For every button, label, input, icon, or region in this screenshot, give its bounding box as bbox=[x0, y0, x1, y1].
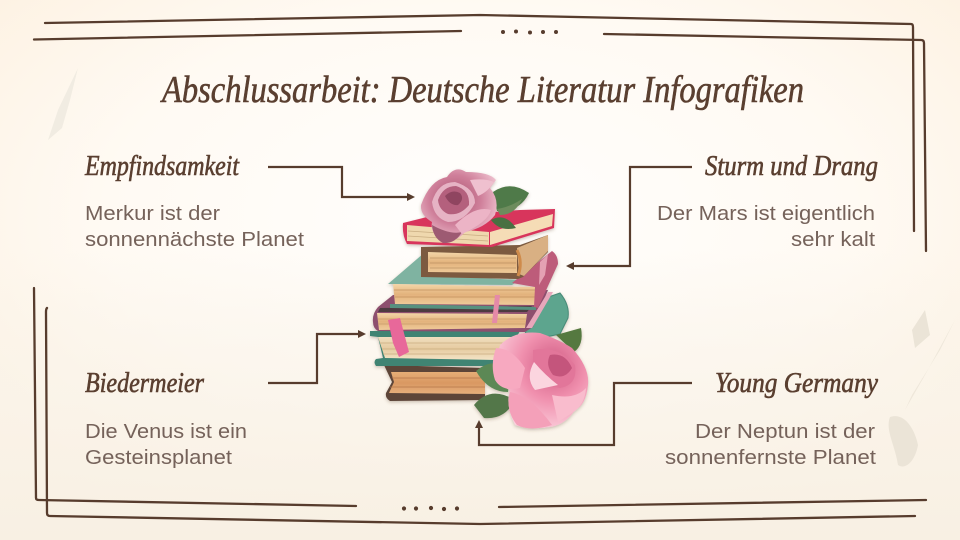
block: Sturm und Drang bbox=[657, 151, 878, 251]
book 6: bottom bbox=[384, 365, 485, 401]
book: green behind bbox=[522, 293, 568, 342]
leaves: bottom rose bbox=[474, 328, 582, 418]
book 3: green top, pink spine bbox=[388, 251, 558, 310]
block: Young Germany bbox=[665, 368, 879, 469]
illustration: book stack with roses bbox=[370, 169, 588, 428]
heading: Young Germany: Young Germany bbox=[715, 368, 879, 399]
bookmark: large bbox=[388, 318, 409, 357]
title: Abschlussarbeit: Deutsche Literatur Infografiken bbox=[159, 69, 804, 111]
text: Mars: sehr kalt bbox=[791, 229, 875, 251]
decorative frame: top right bbox=[34, 15, 926, 251]
text: Venus: Die Venus ist ein bbox=[85, 421, 247, 443]
decorative dots: bottom bbox=[402, 506, 459, 511]
decorative dots: top bbox=[501, 30, 558, 34]
book 4: purple cover bbox=[373, 290, 553, 332]
text: Neptun: sonnenfernste Planet bbox=[665, 447, 876, 469]
arrow: Sturm und Drang to books bbox=[566, 167, 692, 270]
heading: Empfindsamkeit: Empfindsamkeit bbox=[84, 151, 240, 182]
book 1: red top bbox=[403, 209, 555, 247]
heading: Sturm und Drang: Sturm und Drang bbox=[705, 151, 878, 182]
text: Neptun: Der Neptun ist der bbox=[695, 421, 875, 443]
text: Mars bbox=[657, 203, 875, 251]
arrow: Biedermeier to books bbox=[268, 330, 366, 383]
block: Biedermeier bbox=[85, 368, 247, 469]
book 2: tan bbox=[421, 235, 548, 279]
text: Venus bbox=[85, 421, 247, 469]
decorative frame: bottom left bbox=[34, 288, 926, 524]
book 5: cream pages, green cover bbox=[370, 331, 520, 366]
block: Empfindsamkeit bbox=[84, 151, 304, 251]
leaves: top rose bbox=[491, 186, 529, 229]
text: Merkur: Merkur ist der bbox=[85, 203, 220, 225]
text: Neptun bbox=[665, 421, 876, 469]
rose: top bbox=[421, 169, 497, 243]
text: Mars: Der Mars ist eigentlich bbox=[657, 203, 875, 225]
arrow: Young Germany to books bbox=[475, 383, 692, 445]
bookmark: small bbox=[492, 295, 500, 323]
text: Merkur: sonnennächste Planet bbox=[85, 229, 304, 251]
arrow: Empfindsamkeit to books bbox=[268, 167, 415, 201]
rose: bottom bbox=[493, 332, 588, 428]
heading: Biedermeier: Biedermeier bbox=[85, 368, 204, 399]
text: Venus: Gesteinsplanet bbox=[85, 447, 232, 469]
text: Merkur bbox=[85, 203, 304, 251]
